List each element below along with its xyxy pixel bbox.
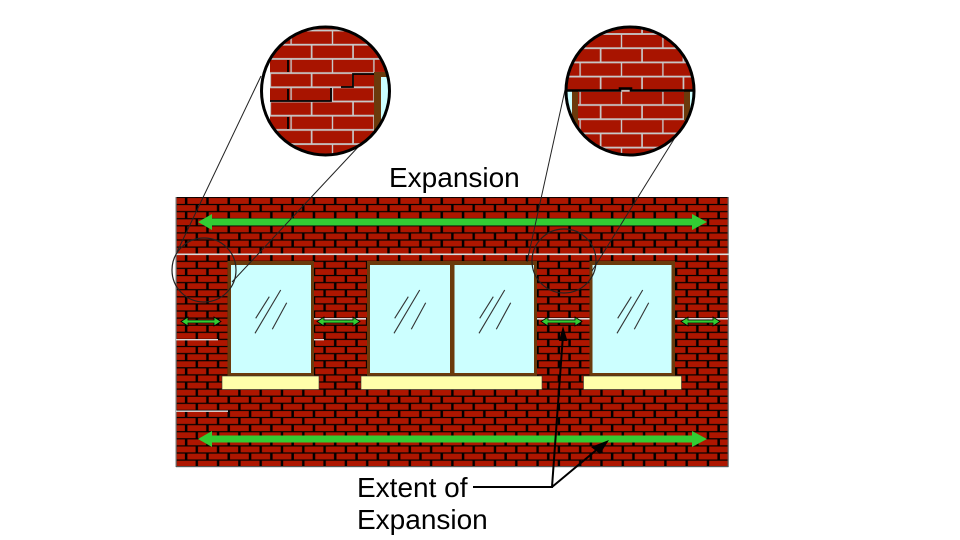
small expansion arrows xyxy=(181,317,720,326)
window 2 xyxy=(361,261,542,390)
label: Extent of Expansion: Extent of xyxy=(357,472,468,503)
bottom expansion arrow xyxy=(198,431,707,447)
detail marker circle left xyxy=(172,238,236,302)
magnified detail left: cracked corner xyxy=(262,25,395,160)
label: Extent of Expansion xyxy=(357,472,488,535)
callout arrows xyxy=(473,326,609,487)
magnified detail right: crack above windows xyxy=(565,25,695,160)
label: Extent of Expansion: Expansion xyxy=(357,504,488,535)
leader lines xyxy=(177,76,676,282)
mortar gap lines xyxy=(176,254,729,412)
brick wall xyxy=(176,197,729,467)
detail marker circle right xyxy=(532,229,596,293)
window 3 xyxy=(584,261,682,390)
heading: Expansion: Expansion xyxy=(389,162,520,193)
expansion diagram xyxy=(171,26,729,535)
window 1 xyxy=(222,261,319,390)
top expansion arrow xyxy=(198,214,707,230)
